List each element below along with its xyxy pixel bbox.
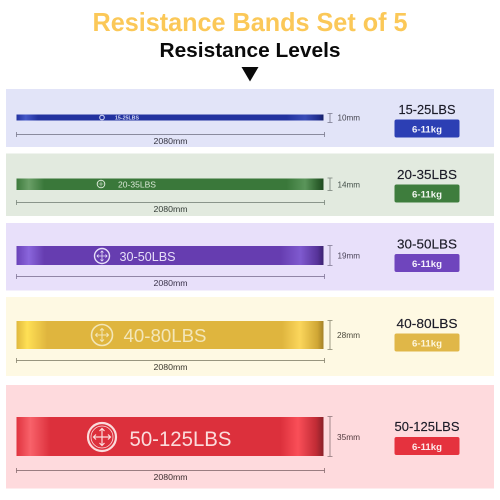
band: yellow: 40-80LBS [124,326,206,346]
pill: 6-11kg [394,254,460,272]
pill: 6-11kg: 6-11kg [412,338,442,350]
label: 20-35LBS: 20-35LBS [397,168,457,182]
label: 40-80LBS: 40-80LBS [396,317,458,331]
panel: 15-25LBS band [6,89,494,147]
subtitle: Resistance Levels [160,40,340,62]
length dimension: 2080mm [16,274,324,288]
pill: 6-11kg [394,184,460,202]
title: Resistance Bands Set of 5 [92,7,408,37]
length dimension: 2080mm: 2080mm [154,279,188,288]
length dimension: 2080mm [16,358,324,372]
length dimension: 2080mm [16,132,324,146]
height dimension: 14mm [328,178,360,190]
height dimension: 14mm: 14mm [338,180,360,190]
length dimension: 2080mm [16,468,324,482]
band: green [16,178,324,190]
height dimension: 19mm [328,246,360,266]
length dimension: 2080mm: 2080mm [154,205,188,214]
length dimension: 2080mm: 2080mm [154,137,188,146]
length dimension: 2080mm [16,200,324,214]
height dimension: 28mm: 28mm [337,331,360,340]
band: red [16,417,324,456]
label: 15-25LBS: 15-25LBS [398,103,456,117]
pill: 6-11kg [394,334,460,352]
length dimension: 2080mm: 2080mm [154,363,188,372]
height dimension: 35mm: 35mm [337,433,360,442]
band: blue: 15-25LBS [115,116,139,122]
height dimension: 28mm [328,320,360,350]
height dimension: 19mm: 19mm [338,252,360,260]
panel: 50-125LBS band [6,385,494,488]
band: blue [16,114,324,122]
pill: 6-11kg [394,437,460,455]
icon: down arrow [242,67,258,82]
band: purple: 30-50LBS [120,249,176,264]
height dimension: 35mm [328,416,360,456]
pill: 6-11kg: 6-11kg [412,259,442,270]
pill: 6-11kg: 6-11kg [412,124,442,136]
panel: 40-80LBS band [6,297,494,376]
pill: 6-11kg: 6-11kg [412,442,442,453]
label: 30-50LBS: 30-50LBS [397,238,457,252]
pill: 6-11kg [394,120,460,138]
band: purple [16,246,324,265]
length dimension: 2080mm: 2080mm [154,473,188,482]
band: yellow [16,321,324,349]
panel: 30-50LBS band [6,223,494,290]
label: 50-125LBS: 50-125LBS [394,420,460,434]
panel: 20-35LBS band [6,154,494,216]
height dimension: 10mm: 10mm [338,114,360,122]
band: red: 50-125LBS [130,428,232,451]
pill: 6-11kg: 6-11kg [412,190,442,200]
band: green: 20-35LBS [118,179,156,189]
height dimension: 10mm [328,114,360,122]
